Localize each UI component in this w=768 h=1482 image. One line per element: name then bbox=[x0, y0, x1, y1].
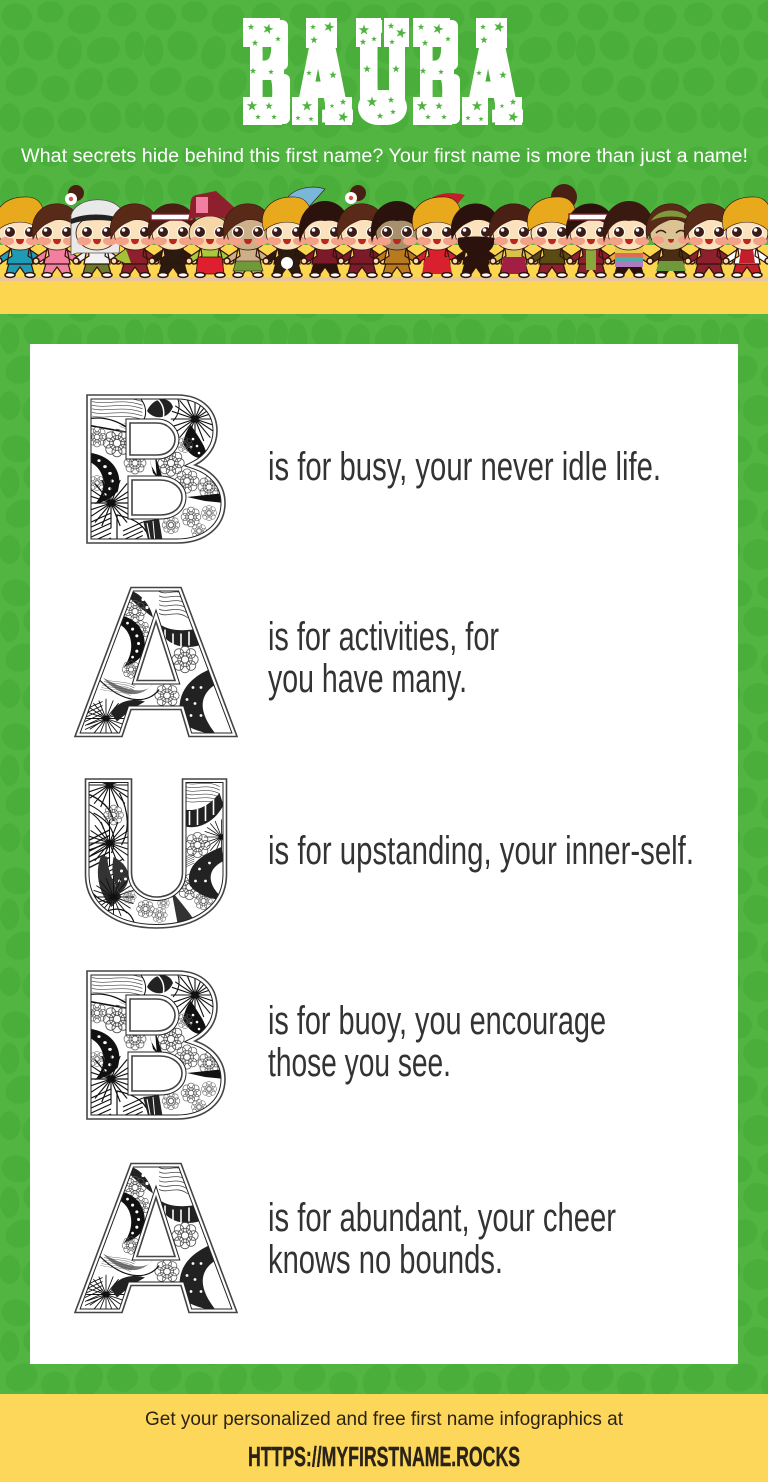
row of cartoon characters bbox=[0, 184, 768, 277]
text: second B line bbox=[268, 999, 606, 1085]
character 17 bbox=[603, 201, 655, 277]
letter A illustration second bbox=[75, 1164, 237, 1314]
character 6 bbox=[186, 191, 234, 277]
subtitle: What secrets hide behind this first name? Your first name is more than just a name! bbox=[21, 146, 748, 167]
letter U illustration bbox=[84, 778, 228, 929]
character 7 bbox=[223, 204, 273, 277]
character 11 bbox=[371, 201, 423, 277]
footer text: Get your personalized and free first name infographics at bbox=[145, 1408, 624, 1430]
character 20 bbox=[722, 197, 768, 277]
character 19 bbox=[684, 204, 734, 277]
character 5 bbox=[148, 204, 198, 277]
text: second A line bbox=[268, 1196, 616, 1282]
panel: white card bbox=[30, 344, 738, 1364]
character 9 bbox=[299, 201, 351, 277]
character 1 bbox=[0, 197, 45, 277]
character 10 bbox=[337, 185, 387, 277]
character 4 bbox=[110, 204, 160, 277]
text: second A line: is for abundant, your cheer bbox=[268, 1196, 616, 1240]
character 14 bbox=[489, 204, 539, 277]
text: A line: is for activities, for bbox=[268, 615, 499, 659]
text: A line: you have many. bbox=[268, 657, 467, 701]
footer url: HTTPS://MYFIRSTNAME.ROCKS bbox=[248, 1441, 520, 1472]
character 8 bbox=[262, 187, 325, 277]
text: second B line: those you see. bbox=[268, 1041, 451, 1085]
character 2 bbox=[32, 185, 84, 277]
title bbox=[243, 0, 522, 152]
text: second A line: knows no bounds. bbox=[268, 1238, 503, 1282]
character 12 bbox=[412, 193, 465, 277]
character 15 bbox=[527, 184, 577, 277]
title letters bbox=[247, 0, 522, 152]
text: second B line: is for buoy, you encourage bbox=[268, 999, 606, 1043]
letter B illustration bbox=[86, 395, 227, 554]
footer band bbox=[0, 1394, 768, 1482]
yellow band bbox=[0, 245, 768, 314]
character 13 bbox=[451, 204, 501, 277]
letter A illustration bbox=[75, 588, 237, 738]
letter B illustration second bbox=[86, 971, 227, 1130]
title slab blocks bbox=[243, 18, 522, 125]
character 16 bbox=[566, 204, 616, 277]
text: A line bbox=[268, 615, 499, 701]
character 18 bbox=[646, 204, 696, 277]
character 3 bbox=[71, 200, 123, 277]
title stars bbox=[247, 20, 519, 123]
